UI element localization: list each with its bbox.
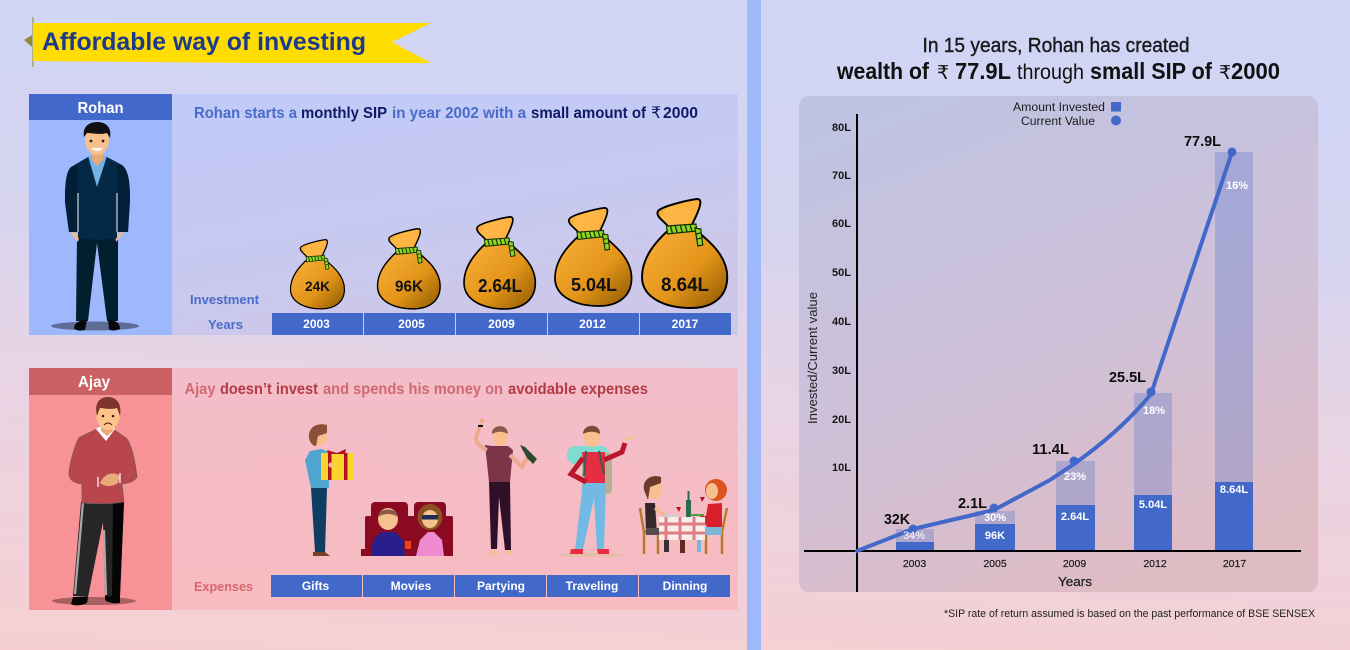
rate of return labels: 30% <box>984 512 1006 524</box>
x axis labels: 2005 <box>983 558 1007 570</box>
y axis labels: 70L <box>832 170 851 182</box>
value labels: 77.9L <box>1184 134 1221 150</box>
y axis labels: 60L <box>832 218 851 230</box>
year cells: 2017 <box>672 317 699 331</box>
Rohan statement: small amount of <box>531 105 647 122</box>
invested labels: 96K <box>985 530 1005 542</box>
money bag 2009: 2.64L <box>478 276 522 296</box>
icon: gifts <box>305 424 353 556</box>
name: Rohan: Rohan <box>78 100 124 117</box>
icon: partying <box>476 418 537 555</box>
chart heading: through <box>1017 61 1084 84</box>
invested labels: 5.04L <box>1139 499 1167 511</box>
y axis labels: 10L <box>832 462 851 474</box>
expense cells: Partying <box>477 579 525 593</box>
legend: Current Value <box>1021 116 1095 128</box>
row label: Expenses: Expenses <box>194 579 253 594</box>
panel: Rohan investment <box>172 94 738 335</box>
invested labels: 8.64L <box>1220 484 1248 496</box>
axes <box>804 114 1301 592</box>
year cells <box>272 313 731 335</box>
chart heading: small SIP of <box>1090 58 1212 84</box>
chart heading: ₹ <box>1219 63 1231 84</box>
Ajay statement: Ajay <box>184 381 216 398</box>
money bag 2005: 96K <box>395 278 423 296</box>
x axis labels <box>903 558 1246 570</box>
invested labels <box>985 484 1248 542</box>
legend <box>1013 102 1121 128</box>
figure: Ajay in sweater <box>52 397 137 605</box>
chart heading: ₹ <box>937 63 949 84</box>
Ajay statement <box>184 381 648 398</box>
Rohan statement <box>194 105 698 122</box>
money bag 2017 <box>642 199 727 308</box>
chart heading <box>836 35 1280 84</box>
panel: Ajay expenses <box>172 368 738 610</box>
chart heading: 2000 <box>1231 58 1280 84</box>
money bag 2012: 5.04L <box>571 275 617 295</box>
y axis labels: 50L <box>832 267 851 279</box>
rate of return labels: 34% <box>903 530 925 542</box>
bars: current value <box>896 152 1253 542</box>
x axis labels: 2003 <box>903 558 926 570</box>
bars: amount invested <box>896 482 1253 551</box>
rate of return labels: 23% <box>1064 471 1086 483</box>
value labels: 32K <box>884 512 911 528</box>
y axis labels: 80L <box>832 122 851 134</box>
row label: Years: Years <box>208 317 243 332</box>
rate of return labels: 18% <box>1143 405 1165 417</box>
icon: movies <box>361 502 453 556</box>
year cells: 2009 <box>488 317 515 331</box>
name: Ajay: Ajay <box>78 374 110 391</box>
money bag 2005 <box>378 229 440 309</box>
year cells: 2012 <box>579 317 606 331</box>
value labels: 25.5L <box>1109 370 1146 386</box>
chart heading: wealth of <box>836 58 929 84</box>
expense cells: Dinning <box>663 579 707 593</box>
y axis labels: 40L <box>832 316 851 328</box>
x axis labels: 2017 <box>1223 558 1246 570</box>
value labels: 2.1L <box>958 496 987 512</box>
invested labels: 2.64L <box>1061 511 1089 523</box>
y axis labels: 20L <box>832 414 851 426</box>
Rohan statement: monthly SIP <box>301 105 387 122</box>
expense cells <box>271 575 730 597</box>
centre divider stripe <box>747 0 761 650</box>
rate of return labels: 16% <box>1226 180 1248 192</box>
Rohan statement: Rohan starts a <box>194 105 297 122</box>
x axis labels: 2012 <box>1143 558 1167 570</box>
y axis title: Invested/Current value <box>806 292 820 424</box>
panel: Rohan portrait <box>29 94 172 335</box>
value labels: 11.4L <box>1032 442 1069 458</box>
value labels <box>884 134 1221 528</box>
y axis labels: 30L <box>832 365 851 377</box>
footnote: *SIP rate of return assumed is based on the past performance of BSE SENSEX <box>944 608 1316 620</box>
money bag 2003 <box>290 240 344 309</box>
Rohan statement: 2000 <box>663 105 698 122</box>
line: current value <box>857 148 1236 551</box>
icon: traveling <box>557 426 634 557</box>
money bag 2009 <box>464 217 535 309</box>
expense cells: Gifts <box>302 579 329 593</box>
year cells: 2003 <box>303 317 330 331</box>
rate of return labels <box>903 180 1248 542</box>
expense cells: Traveling <box>566 579 618 593</box>
panel: Ajay portrait <box>29 368 172 610</box>
Ajay statement: avoidable expenses <box>508 381 648 398</box>
year cells: 2005 <box>398 317 425 331</box>
expense cells: Movies <box>391 579 432 593</box>
icon: dinning <box>640 476 727 554</box>
chart heading: 77.9L <box>955 58 1011 84</box>
money bag 2012 <box>555 208 632 306</box>
panel: chart <box>799 96 1318 592</box>
Ajay statement: doesn’t invest <box>220 381 319 398</box>
Rohan statement: ₹ <box>651 105 661 122</box>
Rohan statement: in year 2002 with a <box>392 105 526 122</box>
Ajay statement: and spends his money on <box>323 381 503 398</box>
legend: Amount Invested <box>1013 102 1105 114</box>
row label: Investment: Investment <box>190 292 260 307</box>
money bag 2003: 24K <box>305 278 330 294</box>
y axis labels <box>832 122 851 474</box>
chart heading: In 15 years, Rohan has created <box>922 35 1190 57</box>
x axis labels: 2009 <box>1063 558 1086 570</box>
money bag 2017: 8.64L <box>661 275 709 296</box>
x axis title: Years <box>1058 574 1093 589</box>
title: Affordable way of investing <box>42 28 366 56</box>
title ribbon <box>24 17 431 67</box>
figure: Rohan in suit <box>51 122 139 331</box>
